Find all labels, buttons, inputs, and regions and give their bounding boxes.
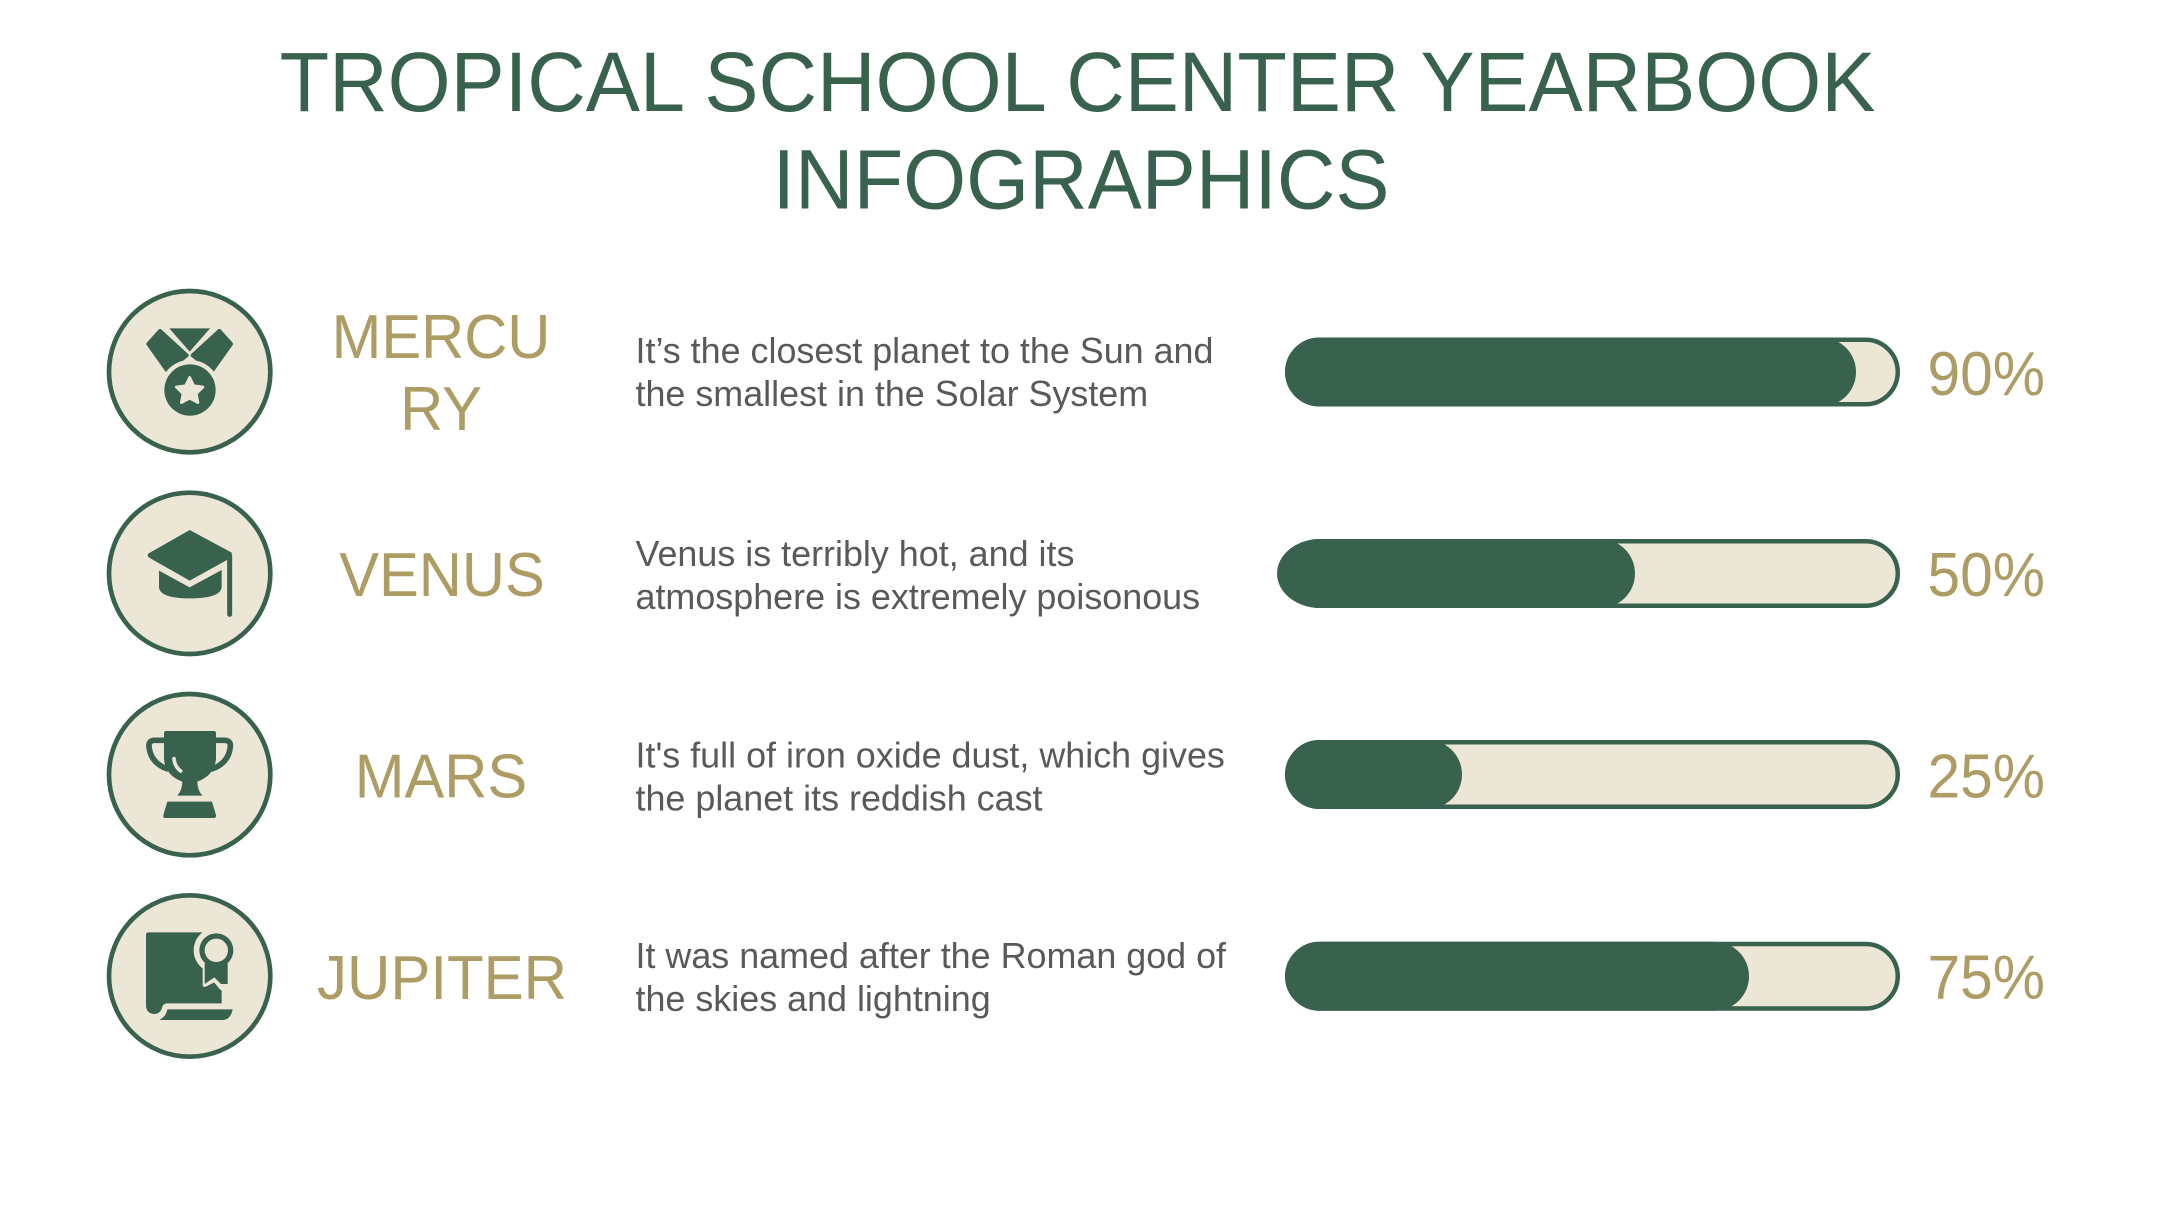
planet name: Jupiter: JUPITER bbox=[317, 943, 567, 1012]
description: Venus: Venus is terribly hot, and its bbox=[636, 534, 1074, 574]
planet name: Mercury bbox=[332, 302, 550, 443]
description: Mars bbox=[636, 736, 1225, 818]
panel: Venus row bbox=[109, 493, 2045, 654]
description: Jupiter bbox=[636, 936, 1227, 1019]
title: INFOGRAPHICS bbox=[773, 133, 1389, 227]
progress bar: 50% bbox=[1277, 539, 1898, 608]
title: TROPICAL SCHOOL CENTER YEARBOOK bbox=[280, 36, 1875, 129]
description: Mercury bbox=[636, 331, 1213, 414]
progress bar: 25% bbox=[1285, 740, 1898, 809]
description: Mars: It's full of iron oxide dust, which gives bbox=[636, 736, 1225, 776]
icon: medal bbox=[109, 291, 270, 452]
panel: Jupiter row bbox=[109, 895, 2045, 1057]
icon: diploma scroll bbox=[109, 895, 270, 1057]
percentage: 90%: 90% bbox=[1928, 339, 2045, 408]
planet name: Mars: MARS bbox=[355, 741, 527, 811]
progress bar: 75% bbox=[1285, 942, 1898, 1011]
description: Jupiter: It was named after the Roman god of bbox=[636, 936, 1227, 976]
icon: trophy bbox=[109, 694, 270, 855]
title bbox=[280, 36, 1875, 227]
planet name: Venus: VENUS bbox=[339, 540, 545, 609]
description: Mercury: the smallest in the Solar System bbox=[636, 374, 1148, 414]
progress bar: 90% bbox=[1285, 338, 1898, 406]
percentage: 75%: 75% bbox=[1928, 942, 2045, 1012]
description: Mars: the planet its reddish cast bbox=[636, 778, 1043, 818]
percentage: 50%: 50% bbox=[1928, 540, 2045, 609]
description: Mercury: It’s the closest planet to the Sun and bbox=[636, 331, 1213, 371]
icon: graduation cap bbox=[109, 493, 270, 654]
description: Jupiter: the skies and lightning bbox=[636, 979, 991, 1019]
description: Venus: atmosphere is extremely poisonous bbox=[636, 577, 1200, 617]
panel: Mars row bbox=[109, 694, 2045, 855]
description: Venus bbox=[636, 534, 1200, 617]
percentage: 25%: 25% bbox=[1928, 741, 2045, 811]
planet name: Mercury: RY bbox=[400, 374, 482, 443]
panel: Mercury row bbox=[109, 291, 2045, 452]
planet name: Mercury: MERCU bbox=[332, 302, 550, 371]
